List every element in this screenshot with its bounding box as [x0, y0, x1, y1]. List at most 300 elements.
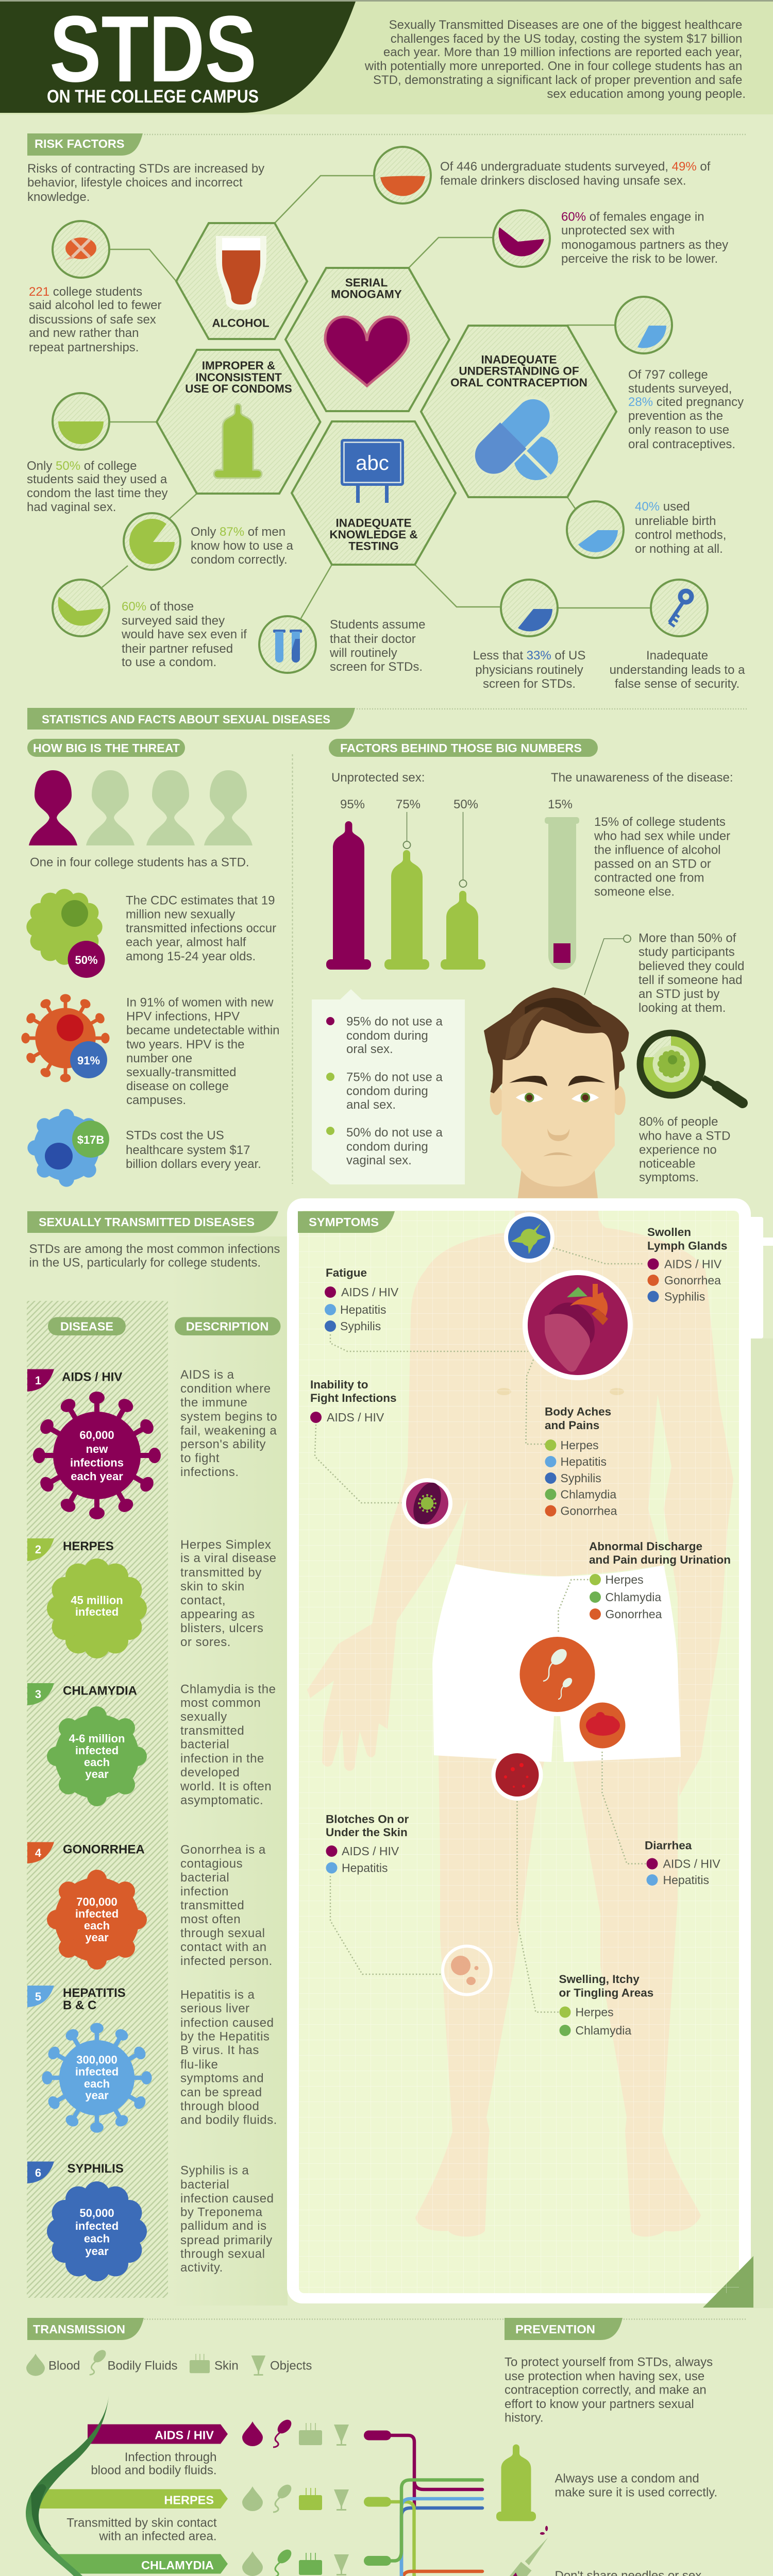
disease: AIDS: AIDS is a: [180, 1368, 234, 1382]
stat: 60 percent refuse: would have sex even if: [121, 628, 247, 641]
disease: gonorrhea: 700,000: [76, 1895, 117, 1908]
text: 50 percent believed: [584, 931, 744, 1015]
icon: blackboard: abc: [356, 452, 389, 474]
callout: inability to fight infections: [310, 1378, 397, 1424]
disease: hepatitis: through blood: [180, 2099, 259, 2113]
prevention intro text: history.: [505, 2411, 544, 2425]
hexagon: oral contraception: ORAL CONTRACEPTION: [450, 376, 587, 389]
disease: hepatitis: flu-like: [180, 2058, 218, 2072]
stat: 91 percent HPV: In 91% of women with new: [126, 995, 274, 1010]
callout: swelling: Herpes: [575, 2005, 614, 2019]
disease: chlamydia: each: [84, 1756, 110, 1769]
callout: abnormal discharge: Gonorrhea: [605, 1607, 662, 1621]
stat: 40 percent birth control: unreliable birth: [635, 514, 716, 528]
stat: 91 percent HPV: [21, 994, 280, 1107]
stat: 221 college students: and new rather than: [29, 326, 139, 340]
stat: 60 percent refuse: [53, 580, 247, 669]
disease: gonorrhea: GONORRHEA: [63, 1842, 145, 1857]
disease: chlamydia: CHLAMYDIA: [63, 1684, 137, 1698]
ribbon: AIDS: [88, 2425, 228, 2477]
stat: 91 percent HPV: 91%: [77, 1054, 100, 1067]
disease: chlamydia: world. It is often: [180, 1780, 272, 1793]
stat: 19 million infections: 50%: [75, 954, 98, 967]
bar: 95 percent: [326, 821, 371, 970]
stat: 50 percent condom use: condom the last time they: [27, 486, 167, 500]
disease: hepatitis: can be spread: [180, 2086, 262, 2099]
callout: blotches: Hepatitis: [342, 1861, 388, 1874]
disease: AIDS: [27, 1368, 277, 1519]
disease: syphilis: through sexual: [180, 2247, 265, 2261]
disease: hepatitis: 300,000: [76, 2054, 117, 2066]
stat: 28 percent oral contraceptives: prevention as the: [628, 409, 723, 423]
disease: chlamydia: sexually: [180, 1710, 227, 1724]
subheading: factors behind numbers: [329, 739, 598, 757]
illustration: man's face: [484, 987, 629, 1198]
disease: chlamydia: 4-6 million: [69, 1732, 125, 1745]
disease: chlamydia: asymptomatic.: [180, 1793, 263, 1807]
disease: herpes: or sores.: [180, 1635, 231, 1649]
hexagon: serial monogamy: [285, 268, 449, 411]
disease: hepatitis: Hepatitis is a: [180, 1988, 255, 2002]
ribbon: AIDS: blood and bodily fluids.: [91, 2464, 216, 2477]
disease: AIDS: each year: [71, 1470, 123, 1483]
hexagon: condoms: IMPROPER &: [202, 359, 275, 372]
disease: chlamydia: developed: [180, 1766, 240, 1780]
intro text: challenges faced by the US today, costing the system $17 billion: [391, 32, 742, 46]
disease: herpes: [27, 1538, 276, 1658]
background strips beside symptoms panel: [168, 1236, 773, 2308]
disease: AIDS: 1: [35, 1374, 41, 1387]
hexagon: alcohol: ALCOHOL: [212, 316, 270, 330]
text: 80 percent no symptoms: who have a STD: [638, 1129, 730, 1143]
icon: test tubes: [273, 630, 302, 663]
disease: AIDS: the immune: [180, 1396, 247, 1410]
callout: inability to fight infections: Fight Infections: [310, 1392, 397, 1404]
disease: syphilis: each: [84, 2232, 110, 2245]
stat: 91 percent HPV: HPV infections, HPV: [126, 1010, 240, 1023]
callout: body aches and pains: Herpes: [561, 1438, 599, 1452]
section: risk factors: [27, 133, 747, 691]
disease: syphilis: infected: [75, 2219, 119, 2232]
callout: body aches and pains: Hepatitis: [561, 1455, 607, 1468]
legend: Objects: [270, 2359, 312, 2373]
callout: diarrhea: Hepatitis: [663, 1873, 709, 1887]
stat: 60 percent females: [493, 210, 728, 267]
disease: herpes: appearing as: [180, 1607, 255, 1621]
icon: pill: [467, 389, 559, 482]
stat: 28 percent oral contraceptives: [615, 297, 744, 451]
disease: gonorrhea: infected person.: [180, 1954, 273, 1968]
chart: unawareness test tube: someone else.: [594, 885, 675, 899]
stat: false sense of security: Inadequate: [646, 649, 708, 663]
disease: chlamydia: transmitted: [180, 1724, 244, 1738]
chart: unawareness test tube: 15%: [548, 798, 573, 811]
chart: unprotected sex condoms: 50%: [453, 798, 478, 811]
stat: 28 percent oral contraceptives: Of 797 college: [628, 368, 708, 382]
callout: abnormal discharge: Chlamydia: [605, 1590, 661, 1604]
text: 50 percent believed: study participants: [638, 945, 735, 959]
stat: 28 percent oral contraceptives: only reason to use: [628, 423, 729, 437]
callout: swollen lymph glands: Syphilis: [664, 1290, 705, 1303]
stat: 28 percent oral contraceptives: students surveyed,: [628, 382, 732, 396]
text: 80 percent no symptoms: symptoms.: [639, 1171, 699, 1184]
disease: AIDS: to fight: [180, 1451, 220, 1465]
icon: key: [669, 591, 692, 626]
icon: lymph circle: [504, 1212, 554, 1263]
disease: AIDS: system begins to: [180, 1410, 277, 1424]
disease: herpes: HERPES: [63, 1539, 114, 1553]
section: sexually transmitted diseases: [27, 1211, 280, 2298]
intro text: sex education among young people.: [547, 87, 746, 101]
icon: sperm circle: [519, 1637, 595, 1712]
icon: discharge circle: [579, 1702, 626, 1749]
stat: 19 million infections: among 15-24 year olds.: [126, 950, 256, 963]
hexagon: knowledge and testing: KNOWLEDGE &: [329, 528, 418, 541]
icon: syringe: [484, 2526, 548, 2576]
text: always use a condom: make sure it is used correctly.: [554, 2485, 717, 2500]
callout: condom usage notes: 95% do not use a: [346, 1015, 443, 1028]
chart: transmission to prevention routes: [364, 2431, 482, 2576]
callout: fatigue: Syphilis: [340, 1319, 381, 1333]
disease: syphilis: SYPHILIS: [67, 2162, 124, 2176]
disease: herpes: contact,: [180, 1594, 226, 1607]
heading: risk factors: RISK FACTORS: [35, 137, 125, 150]
disease: herpes: 2: [35, 1543, 41, 1556]
illustration: helix ribbon: [26, 2396, 116, 2576]
stat: 17 billion cost: [27, 1109, 261, 1187]
callout: condom usage notes: condom during: [346, 1140, 428, 1154]
stat: 19 million infections: million new sexually: [126, 908, 235, 921]
disease: chlamydia: [27, 1683, 276, 1807]
diseases intro text: in the US, particularly for college students.: [29, 1256, 261, 1269]
disease: syphilis: bacterial: [180, 2178, 229, 2192]
stat: 19 million infections: transmitted infections occur: [126, 921, 276, 936]
disease: gonorrhea: through sexual: [180, 1926, 265, 1940]
disease: hepatitis: year: [85, 2089, 109, 2102]
heading: transmission: TRANSMISSION: [33, 2323, 125, 2336]
callout: swelling: or Tingling Areas: [559, 1987, 653, 1999]
section: transmission: [26, 2318, 747, 2576]
hexagon: serial monogamy: SERIAL: [345, 276, 388, 289]
stat: 60 percent refuse: 60% of those: [122, 600, 194, 614]
stat: 221 college students: 221 college students: [29, 285, 142, 299]
callout: body aches and pains: [545, 1405, 617, 1518]
ribbon: herpes: Transmitted by skin contact: [66, 2516, 217, 2530]
ribbon: chlamydia: CHLAMYDIA: [141, 2558, 214, 2572]
icon: diarrhea circle: [492, 1749, 543, 1801]
subheading: how big is the threat: HOW BIG IS THE THREAT: [33, 741, 180, 755]
risk intro text: behavior, lifestyle choices and incorrect: [27, 176, 243, 190]
callout: body aches and pains: Chlamydia: [561, 1488, 616, 1501]
chart: unawareness test tube: [545, 771, 733, 970]
bar: 75 percent: [384, 850, 429, 970]
bar: 50 percent: [441, 891, 485, 970]
header band: [0, 0, 773, 114]
callout: body aches and pains: Syphilis: [561, 1471, 601, 1485]
disease: AIDS: AIDS / HIV: [62, 1370, 122, 1384]
stat: 91 percent HPV: sexually-transmitted: [126, 1065, 236, 1079]
heading: sexually transmitted diseases: [27, 1211, 278, 1233]
heading: prevention: PREVENTION: [515, 2323, 595, 2336]
callout: fatigue: Hepatitis: [340, 1303, 386, 1316]
callout: fatigue: AIDS / HIV: [341, 1285, 399, 1299]
stat: 60 percent females: 60% of females engage in: [561, 210, 704, 224]
disease: herpes: transmitted by: [180, 1566, 262, 1580]
disease: chlamydia: Chlamydia is the: [180, 1683, 276, 1696]
callout: condom usage notes: condom during: [346, 1029, 428, 1043]
stat: students assume: that their doctor: [330, 632, 416, 646]
chart: unawareness test tube: 15% of college students: [594, 815, 726, 829]
legend: Blood: [48, 2359, 80, 2373]
stat: 33 percent physicians: Less that 33% of US: [473, 649, 585, 663]
stat: 60 percent females: perceive the risk to be lower.: [561, 252, 718, 266]
stat: 60 percent females: unprotected sex with: [561, 224, 675, 238]
text: always use a condom: Always use a condom and: [554, 2472, 699, 2485]
disease: syphilis: spread primarily: [180, 2233, 273, 2247]
callout: condom usage notes: anal sex.: [346, 1098, 396, 1112]
disease: syphilis: infection caused: [180, 2192, 274, 2206]
risk intro text: knowledge.: [27, 190, 90, 204]
stat: 17 billion cost: healthcare system $17: [126, 1143, 250, 1157]
icons: transmission row AIDS: [242, 2417, 349, 2447]
stat: 50 percent condom use: Only 50% of college: [27, 459, 137, 473]
intro text: STD, demonstrating a significant lack of proper prevention and safe: [373, 73, 742, 87]
disease: gonorrhea: Gonorrhea is a: [180, 1843, 266, 1857]
stat: false sense of security: understanding leads to a: [610, 663, 745, 677]
callout: body aches and pains: and Pains: [545, 1419, 599, 1432]
callout: inability to fight infections: Inability to: [310, 1378, 368, 1391]
callout: condom usage notes: 75% do not use a: [346, 1071, 443, 1084]
stat: 49 percent female drinkers: Of 446 undergraduate students surveyed, 49% of: [440, 160, 710, 174]
icon: heart circle: [523, 1270, 633, 1380]
diseases intro text: STDs are among the most common infections: [29, 1242, 280, 1256]
stat: 221 college students: repeat partnerships.: [29, 341, 139, 354]
legend: [26, 2348, 312, 2376]
title block: [0, 0, 356, 113]
stat: 91 percent HPV: became undetectable within: [126, 1023, 280, 1038]
ribbon: herpes: [40, 2489, 228, 2543]
callout: swelling: [559, 1973, 653, 2037]
stat: 91 percent HPV: campuses.: [126, 1093, 186, 1107]
disease: gonorrhea: each: [84, 1919, 110, 1932]
stat: 87 percent of men: [124, 513, 293, 570]
intro text: with potentially more unreported. One in four college students has an: [364, 59, 742, 73]
disease: hepatitis: infection caused: [180, 2016, 274, 2030]
ribbon: chlamydia: [57, 2554, 228, 2576]
stat: 17 billion cost: STDs cost the US: [126, 1128, 224, 1143]
chart: unawareness test tube: the influence of alcohol: [594, 843, 721, 857]
stat: 87 percent of men: know how to use a: [191, 539, 293, 553]
chart: unprotected sex condoms: Unprotected sex:: [331, 771, 425, 785]
stat: 40 percent birth control: 40% used: [635, 500, 690, 514]
chart: unprotected sex condoms: 95%: [340, 798, 365, 811]
stat: 50 percent condom use: [27, 393, 167, 514]
hexagon: condoms: USE OF CONDOMS: [185, 382, 292, 395]
icon: magnifying glass: [637, 1029, 743, 1103]
disease: AIDS: 60,000: [79, 1429, 114, 1442]
heading: statistics and facts: STATISTICS AND FACTS ABOUT SEXUAL DISEASES: [42, 713, 330, 726]
chart: unprotected sex condoms: 75%: [396, 798, 421, 811]
callout: blotches: [326, 1812, 409, 1874]
callout: abnormal discharge: [589, 1540, 731, 1621]
ribbon: herpes: HERPES: [164, 2494, 214, 2507]
pill: description column: [175, 1317, 280, 1335]
prevention intro text: To protect yourself from STDs, always: [505, 2355, 713, 2369]
stat: 33 percent physicians: [473, 580, 585, 691]
callout: abnormal discharge: Abnormal Discharge: [589, 1540, 702, 1553]
text: 80 percent no symptoms: 80% of people: [639, 1115, 718, 1129]
stat: 40 percent birth control: control methods,: [635, 528, 726, 542]
text: 50 percent believed: tell if someone had: [638, 973, 742, 987]
stat: 60 percent females: monogamous partners as they: [561, 238, 728, 252]
stat: 60 percent refuse: to use a condom.: [122, 655, 216, 669]
icons: transmission row herpes: [242, 2482, 349, 2512]
icon: blackboard: [341, 439, 404, 503]
disease: syphilis: 6: [35, 2166, 41, 2179]
disease: syphilis: 50,000: [79, 2207, 114, 2219]
disease: AIDS: infections.: [180, 1465, 239, 1479]
hexagon: knowledge and testing: INADEQUATE: [335, 516, 412, 530]
stat: 40 percent birth control: or nothing at all.: [635, 542, 723, 556]
disease: gonorrhea: 4: [35, 1846, 42, 1859]
callout: swelling: Swelling, Itchy: [559, 1973, 640, 1986]
stat: 87 percent of men: condom correctly.: [191, 553, 288, 567]
callout: condom usage notes: vaginal sex.: [346, 1154, 412, 1167]
icon: infection circle: [402, 1478, 452, 1529]
stat: 50 percent condom use: students said they used a: [27, 472, 167, 486]
disease: hepatitis: HEPATITIS: [63, 1986, 126, 2000]
icon: condom: [214, 404, 262, 478]
disease: chlamydia: infected: [75, 1744, 119, 1757]
hexagon: knowledge and testing: [292, 421, 456, 565]
disease: hepatitis: each: [84, 2077, 110, 2090]
stat: 221 college students: said alcohol led to fewer: [29, 298, 161, 312]
disease: gonorrhea: transmitted: [180, 1899, 244, 1912]
stat: false sense of security: [610, 580, 745, 691]
intro text: Sexually Transmitted Diseases are one of the biggest healthcare: [389, 18, 742, 32]
callout: swollen lymph glands: Gonorrhea: [664, 1274, 721, 1287]
stat: false sense of security: false sense of security.: [615, 677, 740, 691]
callout: abnormal discharge: and Pain during Urination: [589, 1553, 731, 1566]
disease: syphilis: year: [85, 2245, 109, 2258]
callout: swollen lymph glands: [647, 1226, 727, 1303]
stat: 221 college students: discussions of safe sex: [29, 313, 156, 327]
callout: swelling: Chlamydia: [575, 2024, 631, 2037]
heading: risk factors: [27, 133, 143, 156]
chart: one in four students: [29, 770, 253, 870]
disease: AIDS: fail, weakening a: [180, 1424, 277, 1437]
disease: gonorrhea: contact with an: [180, 1940, 267, 1954]
disease: chlamydia: most common: [180, 1696, 261, 1710]
stat: 19 million infections: [26, 889, 276, 978]
pill: disease column: [48, 1317, 126, 1335]
icon: heart: [325, 317, 409, 386]
stat: 28 percent oral contraceptives: oral contraceptives.: [628, 437, 735, 451]
disease: chlamydia: 3: [35, 1688, 41, 1701]
stat: 28 percent oral contraceptives: 28% cited pregnancy: [628, 395, 744, 409]
stat: 17 billion cost: billion dollars every year.: [126, 1157, 261, 1171]
callout: inability to fight infections: AIDS / HIV: [327, 1411, 384, 1424]
disease: hepatitis: serious liver: [180, 2002, 250, 2015]
stat: students assume: screen for STDs.: [330, 660, 423, 674]
stat: 87 percent of men: Only 87% of men: [191, 525, 285, 539]
stat: 49 percent female drinkers: [374, 147, 711, 204]
text: 50 percent believed: More than 50% of: [638, 931, 736, 945]
hexagon: condoms: INCONSISTENT: [195, 371, 282, 384]
disease: gonorrhea: most often: [180, 1912, 241, 1926]
hexagon: knowledge and testing: TESTING: [348, 540, 399, 552]
stat: students assume: [259, 616, 425, 674]
disease: gonorrhea: bacterial: [180, 1871, 229, 1885]
callout: diarrhea: AIDS / HIV: [663, 1857, 720, 1870]
hexagon: oral contraception: [421, 326, 616, 497]
hexagon: serial monogamy: MONOGAMY: [331, 287, 402, 301]
stat: 19 million infections: each year, almost half: [126, 936, 246, 949]
callout: swollen lymph glands: Swollen: [647, 1226, 691, 1239]
callout: condom usage notes: 50% do not use a: [346, 1126, 443, 1140]
disease: hepatitis: B virus. It has: [180, 2043, 259, 2057]
stat: 49 percent female drinkers: female drinkers disclosed having unsafe sex.: [440, 174, 686, 188]
disease: hepatitis: infected: [75, 2065, 119, 2078]
disease: hepatitis: [27, 1986, 277, 2133]
disease: herpes: is a viral disease: [180, 1551, 276, 1565]
pill: description column: DESCRIPTION: [186, 1320, 268, 1333]
hexagon: condoms: [157, 350, 321, 494]
callout: condom usage notes: oral sex.: [346, 1042, 393, 1056]
disease: syphilis: activity.: [180, 2261, 223, 2275]
icons: transmission row chlamydia: [242, 2547, 349, 2576]
stat: 91 percent HPV: two years. HPV is the: [126, 1038, 244, 1052]
disease: gonorrhea: [27, 1842, 273, 1970]
stat: 40 percent birth control: [567, 500, 726, 558]
shorts: [432, 1564, 681, 1762]
section: prevention: [481, 2318, 717, 2576]
section: statistics and facts: [21, 708, 747, 1198]
icon: condom: [496, 2444, 536, 2521]
title block: ON THE COLLEGE CAMPUS: [47, 87, 259, 107]
disease: AIDS: new: [86, 1443, 108, 1455]
stat: students assume: Students assume: [330, 618, 425, 632]
chart: unprotected sex condoms: [326, 771, 485, 970]
disease: hepatitis: symptoms and: [180, 2071, 264, 2086]
text: 80 percent no symptoms: noticeable: [639, 1157, 695, 1171]
stat: 60 percent refuse: their partner refused: [122, 642, 233, 656]
callout: body aches and pains: Gonorrhea: [561, 1504, 617, 1518]
stat: 19 million infections: The CDC estimates that 19: [126, 893, 275, 908]
callout: blotches: Blotches On or: [326, 1812, 409, 1826]
panel: symptoms: [287, 1198, 773, 2308]
icon: beer glass: [216, 236, 266, 310]
callout: diarrhea: Diarrhea: [645, 1839, 692, 1852]
disease: hepatitis: 5: [35, 1990, 41, 2003]
disease: gonorrhea: contagious: [180, 1857, 243, 1871]
ribbon: AIDS: Infection through: [125, 2450, 216, 2464]
callout: condom usage notes: [312, 989, 465, 1184]
stat: 33 percent physicians: screen for STDs.: [483, 677, 576, 691]
chart: unawareness test tube: passed on an STD or: [594, 857, 711, 871]
prevention intro text: contraception correctly, and make an: [505, 2383, 707, 2397]
illustration: body: [307, 1211, 733, 2236]
heading: transmission: [27, 2318, 144, 2340]
ribbon: AIDS: AIDS / HIV: [155, 2429, 214, 2442]
callout: swollen lymph glands: Lymph Glands: [647, 1240, 727, 1252]
heading: sexually transmitted diseases: SEXUALLY TRANSMITTED DISEASES: [39, 1215, 255, 1229]
heading: prevention: [505, 2318, 623, 2340]
disease: AIDS: infections: [70, 1456, 124, 1469]
text: 80 percent no symptoms: experience no: [639, 1143, 717, 1157]
disease: chlamydia: year: [85, 1768, 109, 1781]
text: 50 percent believed: an STD just by: [638, 987, 719, 1001]
